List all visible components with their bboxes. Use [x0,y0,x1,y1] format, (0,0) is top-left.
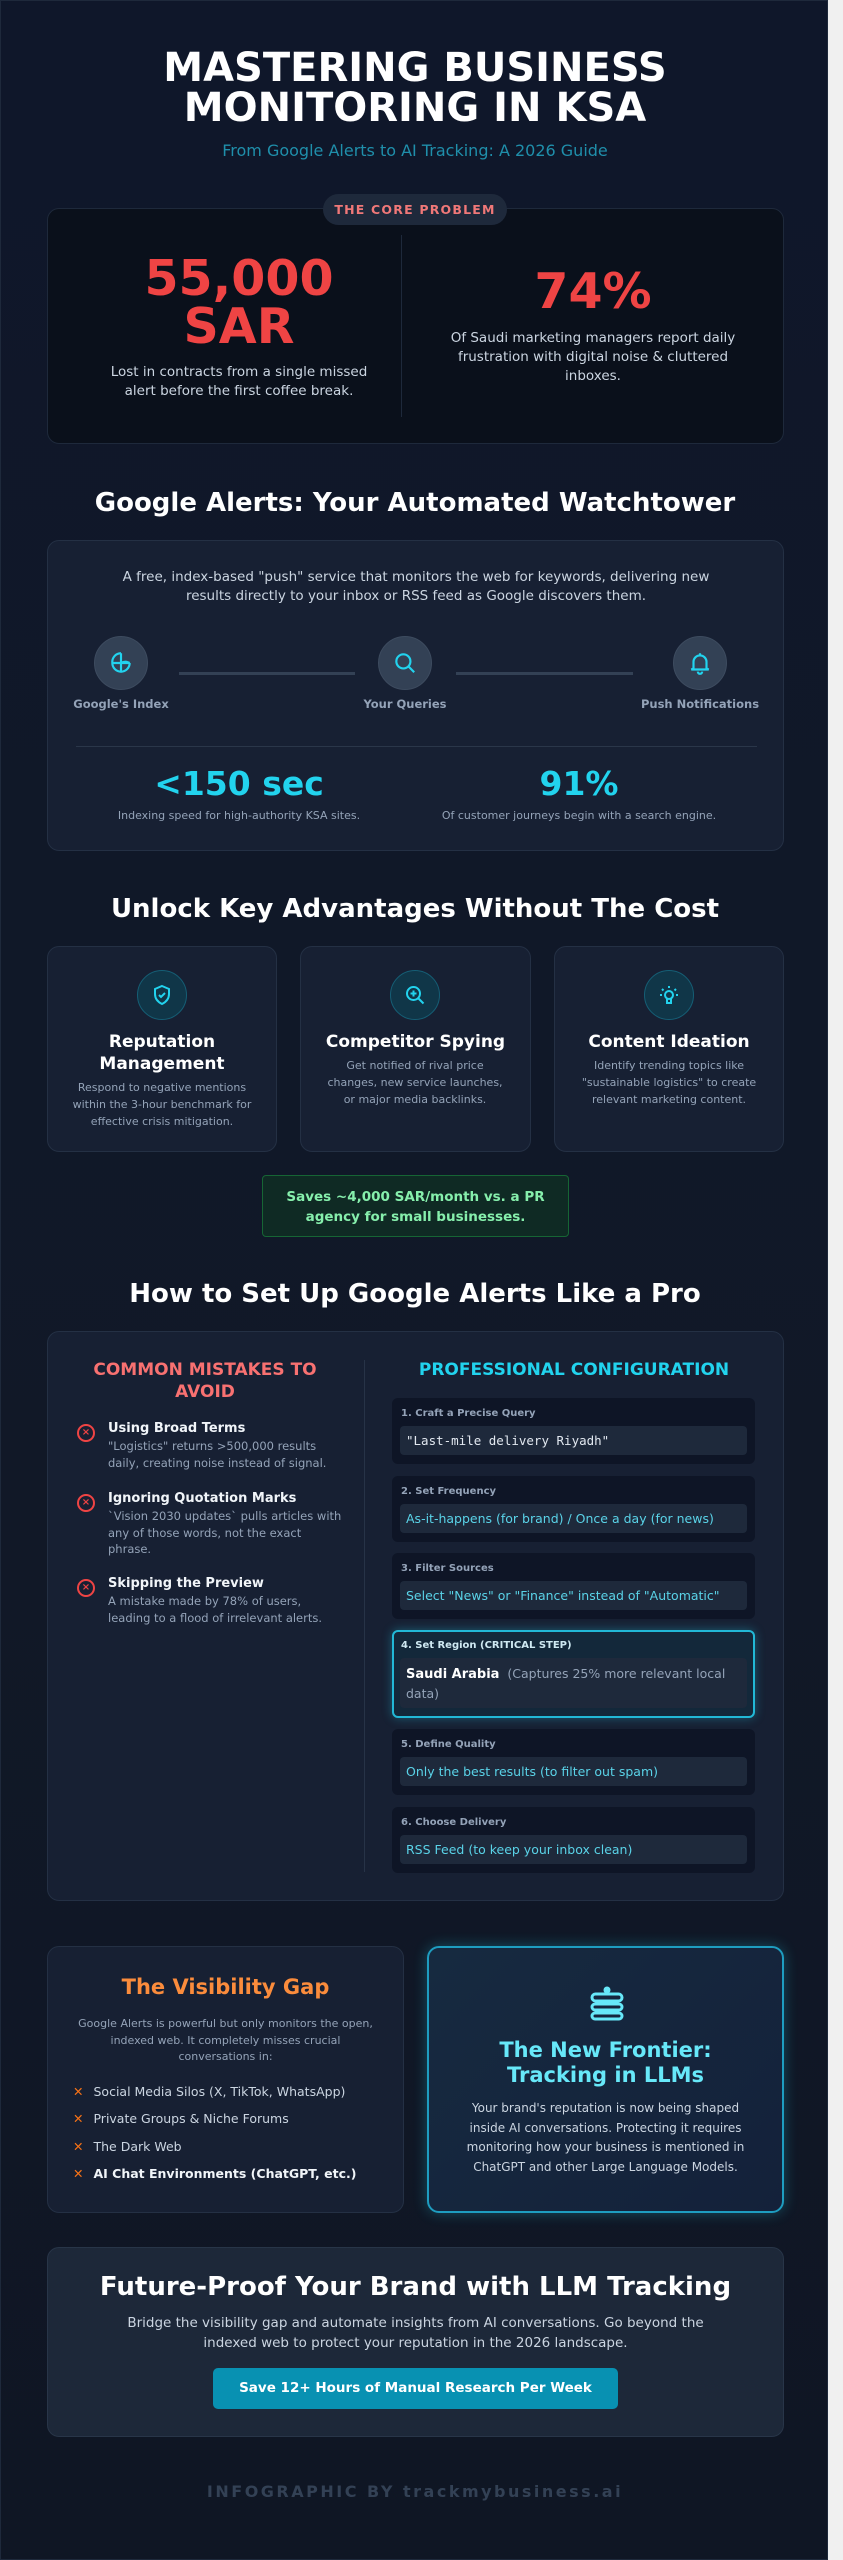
step 3 [392,1553,755,1619]
step 6: 6. Choose Delivery [401,1817,506,1828]
button: Save 12+ Hours of Manual Research Per Week [239,2380,592,2396]
divider [76,746,757,747]
panel: google alerts: Push Notifications [641,697,759,711]
heading: advantages: Unlock Key Advantages Without The Cost [111,894,719,924]
stat: 74%: 74% [534,263,652,320]
mistake 2: phrase. [108,1542,151,1556]
icon: stack [590,1986,624,2020]
text: frustration: Of Saudi marketing managers report daily frustration with digital noise & cluttered inboxes. [451,330,735,384]
card: content [554,946,784,1152]
labels: Google's Index [73,697,169,711]
panel: CTA: Bridge the visibility gap and automate insights from AI conversations. Go beyond the indexed web to protect your reputation in the 2026 landscape. [127,2315,704,2351]
connector lines [179,672,355,675]
card: content: Identify trending topics like [594,1059,744,1072]
card: new frontier [427,1946,784,2213]
list: missed channels: ✕ Social Media Silos (X, TikTok, WhatsApp) [73,2084,345,2099]
panel: google alerts: Your Queries [363,697,447,711]
heading: google alerts: Google Alerts: Your Automated Watchtower [95,488,735,518]
title: MONITORING IN KSA [184,85,646,131]
step 6: RSS Feed (to keep your inbox clean) [406,1842,632,1857]
description: A free, index-based "push" service that monitors the web for keywords, delivering new results directly to your inbox or RSS feed as Google discovers them. [123,569,709,604]
step 3: 3. Filter Sources [401,1563,494,1574]
card: new frontier: The New Frontier: [499,2038,712,2062]
list: missed channels: ✕ AI Chat Environments (ChatGPT, etc.) [73,2166,356,2181]
card: visibility gap: Google Alerts is powerful but only monitors the open, indexed web. It completely misses crucial conversations in: [78,2017,373,2063]
mistake 1: "Logistics" returns >500,000 results [108,1439,316,1453]
card: content: Content Ideation [588,1032,750,1052]
card: visibility gap: The Visibility Gap [122,1975,329,1999]
mistake 2: Ignoring Quotation Marks [108,1491,296,1506]
stat: 91%: 91% [540,764,618,803]
mistake 3: Skipping the Preview [108,1576,264,1591]
card: reputation [47,946,277,1152]
icon: google index [94,636,148,690]
step 5: Only the best results (to filter out spam) [406,1764,658,1779]
step 4 critical: Saudi Arabia (Captures 25% more relevant local data) [406,1666,725,1701]
panel: core problem [47,208,784,444]
card: reputation: within the 3-hour benchmark for [73,1098,251,1111]
card: visibility gap [47,1946,404,2213]
step 1: 1. Craft a Precise Query [401,1408,536,1419]
divider [401,235,402,417]
step 1: "Last-mile delivery Riyadh" [406,1433,609,1448]
card: competitor: changes, new service launches, [327,1076,503,1089]
panel: google alerts [47,540,784,851]
stat: 55,000 SAR: 55,000 [144,250,334,307]
icon: bell [673,636,727,690]
step 1 [392,1398,755,1464]
mistake 2: `Vision 2030 updates` pulls articles with [108,1509,341,1523]
mistake 2: × [82,1497,90,1508]
mistake 1 [77,1421,326,1470]
card: reputation: Management [99,1054,225,1074]
panel: google alerts: Indexing speed for high-authority KSA sites. [118,809,360,822]
mistake 1: daily, creating noise instead of signal. [108,1456,326,1470]
card: content: relevant marketing content. [592,1093,746,1106]
step 5 [392,1729,755,1795]
heading: mistakes: COMMON MISTAKES TO AVOID [93,1360,317,1402]
footer: INFOGRAPHIC BY trackmybusiness.ai [207,2482,623,2501]
step 2: 2. Set Frequency [401,1486,496,1497]
stat: 55,000 SAR [144,250,334,355]
mistake 3: × [82,1582,90,1593]
mistake 2: any of those words, not the exact [108,1526,301,1540]
card: new frontier: Tracking in LLMs [507,2063,704,2087]
step 2: As-it-happens (for brand) / Once a day (for news) [406,1511,714,1526]
callout: savings [262,1175,569,1237]
card: competitor: or major media backlinks. [344,1093,486,1106]
panel: CTA: Future-Proof Your Brand with LLM Tracking [100,2272,731,2302]
card: reputation: Reputation [109,1032,215,1052]
step 2 [392,1476,755,1542]
badge: core problem: THE CORE PROBLEM [334,202,496,217]
heading: configuration: PROFESSIONAL CONFIGURATION [419,1360,729,1380]
step 3: Select "News" or "Finance" instead of "Automatic" [406,1588,720,1603]
stat: indexing speed: <150 sec [154,764,324,803]
panel: setup [47,1331,784,1901]
card: reputation: effective crisis mitigation. [91,1115,233,1128]
title [163,45,667,131]
step 6 [392,1807,755,1873]
list: missed channels: ✕ The Dark Web [73,2139,182,2154]
mistake 3: A mistake made by 78% of users, [108,1594,301,1608]
mistake 2 [77,1491,341,1556]
step 5: 5. Define Quality [401,1739,496,1750]
mistake 3 [77,1576,322,1625]
callout: savings: Saves ~4,000 SAR/month vs. a PR agency for small businesses. [286,1189,545,1225]
card: competitor: Get notified of rival price [346,1059,484,1072]
card: competitor [300,946,531,1152]
card: new frontier: Your brand's reputation is now being shaped inside AI conversations. Protecting it requires monitoring how your business is mentioned in ChatGPT and other Large Language Models. [467,2101,744,2174]
card: content: "sustainable logistics" to create [582,1076,756,1089]
heading: setup: How to Set Up Google Alerts Like a Pro [129,1279,701,1309]
icon: queries [378,636,432,690]
title: MASTERING BUSINESS [163,45,667,91]
card: competitor: Competitor Spying [326,1032,505,1052]
button [213,2368,618,2409]
mistake 1: × [82,1427,90,1438]
step 4 critical [392,1630,755,1718]
step 4 critical: 4. Set Region (CRITICAL STEP) [401,1640,572,1651]
badge: core problem [323,194,507,225]
panel: google alerts: Of customer journeys begin with a search engine. [442,809,716,822]
text: lost contracts: Lost in contracts from a single missed alert before the first coffee break. [111,364,367,399]
list: missed channels [73,2084,356,2181]
subtitle: From Google Alerts to AI Tracking: A 2026 Guide [222,141,608,160]
mistake 3: leading to a flood of irrelevant alerts. [108,1611,322,1625]
stat: 55,000 SAR: SAR [184,298,294,355]
panel: CTA [47,2247,784,2437]
mistake 1: Using Broad Terms [108,1421,245,1436]
divider [364,1360,365,1872]
list: missed channels: ✕ Private Groups & Niche Forums [73,2111,289,2126]
card: reputation: Respond to negative mentions [78,1081,246,1094]
